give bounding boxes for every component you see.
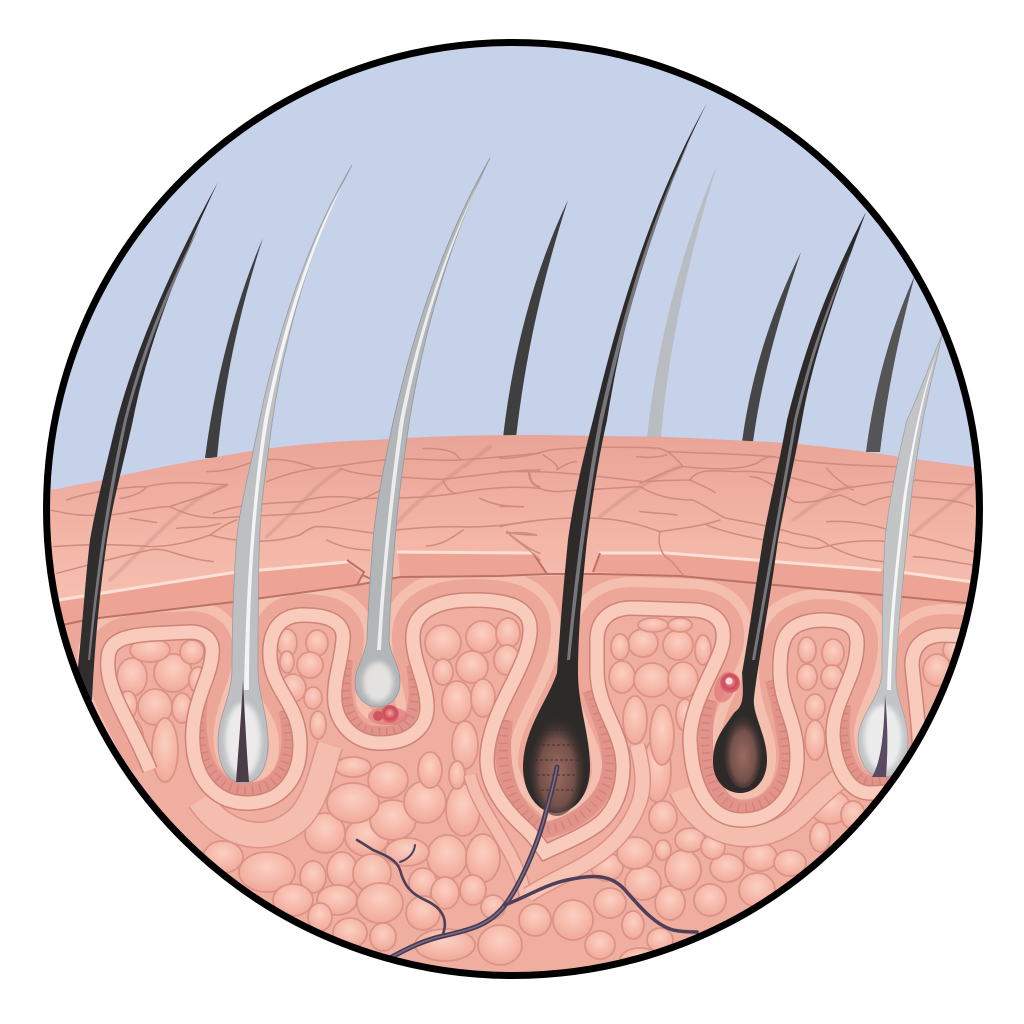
grey hair with bulb, far right (858, 335, 942, 777)
outer layers wrapping the follicle bases (200, 745, 838, 898)
grey hair with follicle bulb, left (218, 165, 352, 783)
fat cells in the lobes and lower dermis (117, 618, 967, 972)
inflamed bump (714, 672, 740, 702)
background hairs behind the skin (205, 165, 915, 458)
dermis base (116, 608, 944, 972)
front edge of the plates (58, 562, 362, 625)
speckled sheath at the follicle bases (199, 660, 905, 830)
nerve fibres (357, 767, 697, 958)
grey hair with follicle bulb, centre-left (355, 158, 490, 725)
plate bottom edge line (40, 553, 990, 630)
skin surface with cracked plates (30, 435, 995, 630)
epidermal pockets around the follicles (77, 576, 966, 838)
hair shadows on the surface (110, 447, 973, 580)
sky background (50, 46, 974, 490)
surface cracks right (500, 447, 973, 575)
dark hair, far left (74, 182, 218, 700)
dark hair with bulb and inflamed bump (710, 212, 866, 793)
plate highlights (58, 552, 973, 600)
light basement band winding around the follicles (108, 600, 990, 852)
dark hair with large bulb and brown core (523, 103, 707, 816)
surface cracks left (50, 448, 540, 573)
inflamed nodule (368, 705, 408, 725)
